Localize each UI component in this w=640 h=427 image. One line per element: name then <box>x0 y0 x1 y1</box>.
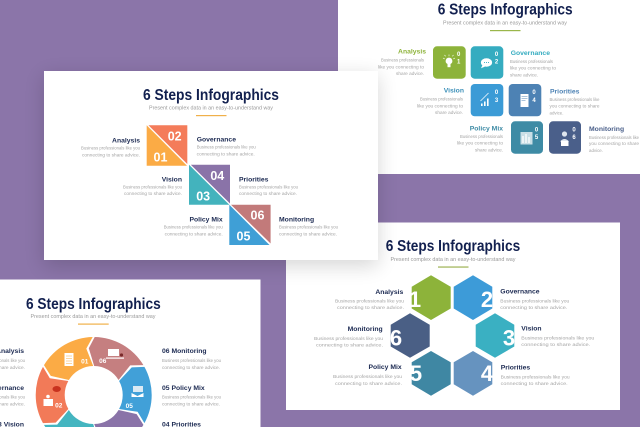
label: Vision: Vision <box>521 326 542 332</box>
tile 06: person with laptop: 6 <box>572 135 576 141</box>
tile 06: person with laptop <box>549 121 581 154</box>
label: Analysis: Analysis <box>112 138 140 144</box>
label: Priorities <box>550 88 600 116</box>
label: Vision: Business professionals <box>420 96 464 102</box>
label: Analysis <box>378 48 426 76</box>
label: Policy Mix <box>457 126 504 152</box>
tile 05: chart board: 0 <box>535 128 539 134</box>
tile 05: chart board: 5 <box>535 135 539 141</box>
square: steps 03 and 04: 04 <box>210 169 224 183</box>
label: Analysis: Business professionals like you <box>81 146 140 150</box>
label: Analysis: share advice. <box>396 71 424 76</box>
square: steps 05 and 06: 05 <box>237 230 250 244</box>
heading: cycle slide title: 6 Steps Infographics <box>26 296 161 313</box>
icon: monitor on desk <box>106 349 124 359</box>
label: Vision: Vision <box>162 176 182 184</box>
label: Governance: like you connecting to <box>510 66 556 70</box>
tile 03: growth chart <box>471 84 503 116</box>
label: Governance: Governance <box>500 288 540 296</box>
label: Governance: Governance <box>511 50 550 57</box>
label: Priorities: Priorities <box>550 88 580 96</box>
label: Priorities: you connecting to share <box>550 104 600 108</box>
label: Governance: Business professionals like you <box>500 298 570 303</box>
label: Analysis: Business professionals <box>381 58 425 62</box>
label: Policy Mix <box>164 216 223 237</box>
tile 02: speech bubble <box>471 46 503 79</box>
label: 06 Monitoring: Business professionals like you <box>162 358 221 363</box>
icon: mail envelope <box>132 386 144 397</box>
icon: clipboard <box>64 353 74 366</box>
label: Analysis: Analysis <box>398 48 426 56</box>
label: 02 Governance <box>0 385 25 407</box>
label: Monitoring: Monitoring <box>279 216 314 224</box>
heading: tiles slide title: 6 Steps Infographics <box>438 2 573 18</box>
panel: square tiles slide <box>338 0 640 174</box>
label: Governance: Governance <box>197 136 236 144</box>
label: Vision: share advice. <box>435 110 463 115</box>
label: Analysis <box>81 138 140 157</box>
tile 02: speech bubble: 2 <box>495 60 499 66</box>
label: Analysis: Analysis <box>375 289 404 296</box>
label: Vision: Business professionals like you <box>123 184 182 190</box>
label: Priorities: Business professionals like you <box>239 184 298 190</box>
label: Vision <box>123 176 182 196</box>
cycle ring chart: 05 <box>126 403 133 410</box>
hexagon 2: 2 <box>481 287 493 312</box>
label: Priorities <box>239 176 298 196</box>
hexagon 3: 3 <box>503 326 515 350</box>
label: 01 Analysis <box>0 348 25 370</box>
label: Vision: connecting to share advice. <box>124 191 182 196</box>
label: Monitoring <box>314 326 383 348</box>
label: Priorities: advice. <box>550 110 564 116</box>
icon: person with speech bubble <box>44 386 61 406</box>
label: Monitoring <box>589 126 639 153</box>
cycle ring chart: 06 <box>99 358 107 365</box>
label: Vision: like you connecting to <box>417 104 463 108</box>
label: Monitoring: Business professionals like you <box>279 225 338 230</box>
subtitle: cycle slide: Present complex data in an easy-to-understand way <box>30 314 156 320</box>
label: Policy Mix: connecting to share advice. <box>335 381 402 386</box>
hexagon 5 <box>410 351 451 396</box>
hexagon 5: 5 <box>410 361 422 386</box>
heading: triangles slide title: 6 Steps Infographics <box>143 87 279 104</box>
label: Policy Mix: share advice. <box>475 148 503 152</box>
label: Priorities: Business professionals like you <box>501 374 570 379</box>
label: Policy Mix: Business professionals like you <box>164 225 223 230</box>
label: Policy Mix: Policy Mix <box>189 216 223 224</box>
label: 05 Policy Mix <box>162 385 221 407</box>
label: Vision <box>521 326 595 347</box>
label: Vision: Business professionals like you <box>521 335 595 340</box>
tile 03: growth chart: 3 <box>495 98 499 104</box>
tile 06: person with laptop: 0 <box>572 128 576 134</box>
label: 05 Policy Mix: connecting to share advice. <box>162 402 220 407</box>
hexagon 1 <box>409 275 451 320</box>
label: Priorities: connecting to share advice. <box>239 191 297 196</box>
label: Governance: share advice. <box>510 72 538 78</box>
tile 04: document <box>509 84 541 116</box>
label: Priorities <box>501 364 570 386</box>
square: steps 03 and 04 <box>189 165 230 205</box>
tile 04: document: 4 <box>532 98 536 104</box>
label: Priorities: Business professionals like <box>550 97 600 102</box>
label: Governance <box>500 288 570 310</box>
label: Governance: connecting to share advice. <box>500 305 567 310</box>
label: Analysis: connecting to share advice. <box>337 305 404 310</box>
hexagon 4 <box>454 351 494 396</box>
square: steps 01 and 02: 01 <box>154 150 167 164</box>
label: Governance: connecting to share advice. <box>197 151 255 156</box>
tile 04: document: 0 <box>532 90 536 96</box>
label: 06 Monitoring: connecting to share advice. <box>162 365 220 370</box>
hexagon 1: 1 <box>409 287 421 312</box>
label: Monitoring: connecting to share advice. <box>316 342 383 348</box>
label: 05 Policy Mix: 05 Policy Mix <box>162 385 205 392</box>
tile 01: lightbulb: 1 <box>457 60 461 66</box>
subtitle: tiles slide: Present complex data in an easy-to-understand way <box>443 20 568 26</box>
cycle ring chart: 01 <box>81 358 89 365</box>
label: Analysis: connecting to share advice. <box>82 152 140 157</box>
heading: hexagon slide title: 6 Steps Infographics <box>386 238 520 255</box>
label: Policy Mix: Business professionals like you <box>333 374 402 379</box>
tile 02: speech bubble: 0 <box>495 52 499 58</box>
tile 05: chart board <box>511 121 543 154</box>
label: Priorities: connecting to share advice. <box>501 381 568 386</box>
label: Monitoring: connecting to share advice. <box>279 232 337 237</box>
square: steps 01 and 02 <box>147 125 187 166</box>
label: Governance: Business professionals <box>510 59 554 64</box>
cycle ring chart <box>36 337 152 427</box>
label: Monitoring: you connecting to share <box>589 141 639 146</box>
label: Monitoring: Monitoring <box>589 126 624 133</box>
label: Governance: Business professionals like you <box>197 144 256 150</box>
label: 06 Monitoring <box>162 348 221 370</box>
label: Policy Mix: Business professionals <box>460 134 504 139</box>
label: Policy Mix: Policy Mix <box>368 364 402 371</box>
square: steps 01 and 02: 02 <box>168 130 182 144</box>
label: Analysis: like you connecting to <box>378 64 424 70</box>
label: Analysis: Business professionals like you <box>335 298 404 303</box>
label: Monitoring: advice. <box>589 148 603 153</box>
panel: triangles slide <box>44 71 378 260</box>
label: Governance <box>510 50 556 78</box>
label: Vision: Vision <box>444 88 464 94</box>
subtitle: hexagon slide: Present complex data in an easy-to-understand way <box>390 257 516 263</box>
label: Policy Mix: Policy Mix <box>470 126 503 132</box>
hexagon 6 <box>390 313 430 358</box>
label: 06 Monitoring: 06 Monitoring <box>162 348 207 355</box>
tile 01: lightbulb <box>433 46 466 79</box>
label: Governance <box>197 136 256 156</box>
hexagon 2 <box>454 275 493 320</box>
cycle ring chart: 02 <box>55 402 63 409</box>
label: Priorities: Priorities <box>239 176 269 184</box>
label: Policy Mix: like you connecting to <box>457 140 503 146</box>
panel: hexagon slide <box>286 222 620 410</box>
label: Monitoring <box>279 216 338 237</box>
label: Policy Mix: connecting to share advice. <box>165 232 223 237</box>
subtitle: triangles slide: Present complex data in an easy-to-understand way <box>149 106 274 112</box>
hexagon 4: 4 <box>481 361 494 386</box>
square: steps 05 and 06: 06 <box>251 209 264 223</box>
tile 01: lightbulb: 0 <box>457 52 461 58</box>
hexagon 3 <box>476 313 515 358</box>
label: Vision: connecting to share advice. <box>521 342 590 347</box>
square: steps 05 and 06 <box>229 205 271 245</box>
label: Priorities: Priorities <box>501 364 530 372</box>
tile 03: growth chart: 0 <box>495 90 499 96</box>
panel: circular cycle slide <box>0 280 260 427</box>
label: Policy Mix <box>333 364 402 386</box>
hexagon 6: 6 <box>390 326 402 350</box>
label: Analysis <box>335 289 404 310</box>
square: steps 03 and 04: 03 <box>196 190 210 204</box>
label: Monitoring: Business professionals like you <box>314 336 383 341</box>
label: 05 Policy Mix: Business professionals like you <box>162 395 221 400</box>
label: Vision <box>417 88 464 115</box>
label: Monitoring: Monitoring <box>348 326 383 333</box>
